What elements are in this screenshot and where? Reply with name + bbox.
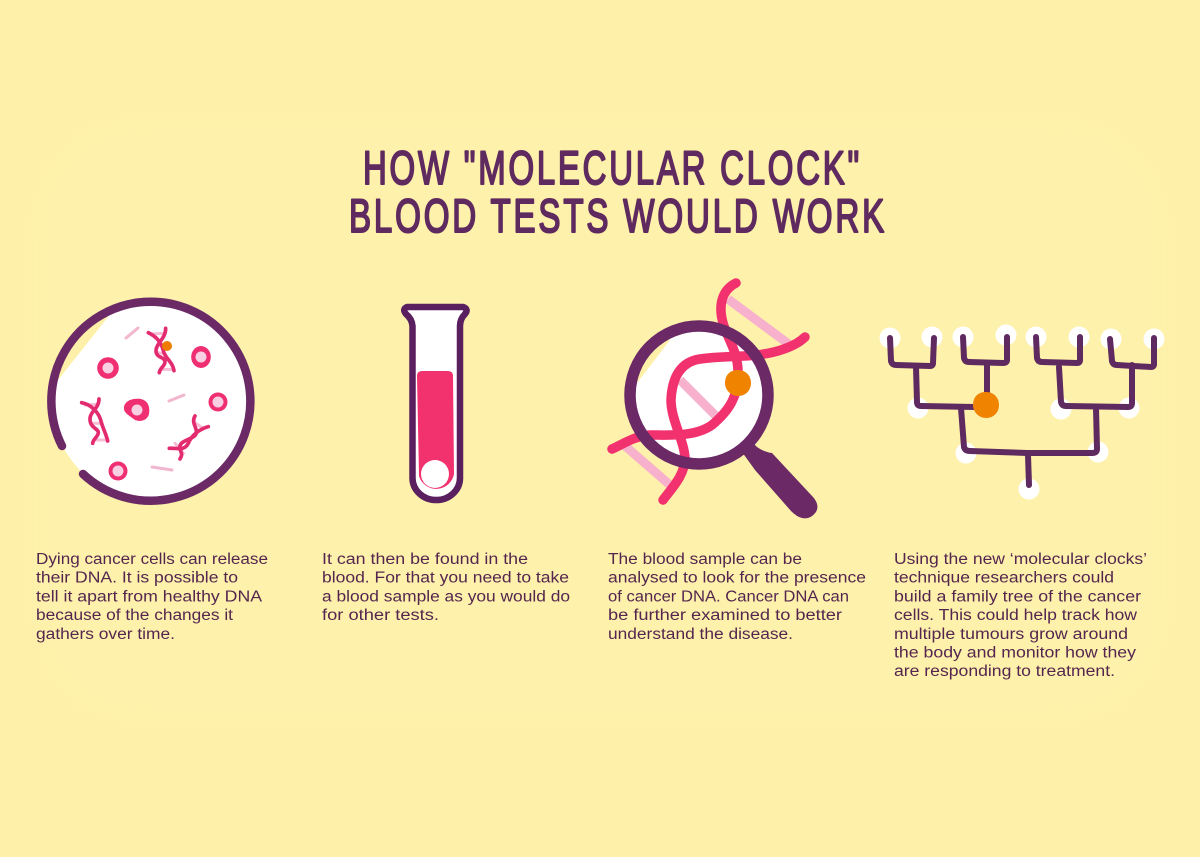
text: step 4: the body and monitor how they — [894, 644, 1136, 662]
DNA strands — [612, 283, 805, 500]
text: step 3: be further examined to better — [608, 607, 842, 624]
text: step 4: Using the new ‘molecular clocks’ — [894, 551, 1147, 568]
text: step 2 — [322, 551, 570, 624]
mutation marker — [725, 370, 751, 396]
text: step 4: are responding to treatment. — [894, 663, 1115, 680]
fragments of DNA — [126, 328, 184, 470]
text: step 4: multiple tumours grow around — [894, 626, 1128, 643]
text: step 1 — [36, 551, 268, 643]
text: step 3: of cancer DNA. Cancer DNA can — [608, 588, 849, 605]
icon: mutation marker — [162, 341, 172, 351]
icon: blood test tube — [404, 307, 467, 500]
title: BLOOD TESTS WOULD WORK — [349, 189, 887, 242]
text: step 1: tell it apart from healthy DNA — [36, 588, 263, 605]
text: step 1: because of the changes it — [36, 607, 234, 624]
magnifier handle — [742, 440, 817, 518]
text: step 4: build a family tree of the cancer — [894, 588, 1141, 605]
text: step 1: gathers over time. — [36, 626, 175, 643]
text: step 4: technique researchers could — [894, 570, 1114, 587]
text: step 4 — [894, 551, 1147, 680]
icon: magnifying glass over DNA — [612, 283, 817, 518]
icon: small DNA strands — [82, 328, 208, 459]
text: step 3 — [608, 551, 866, 643]
title: HOW "MOLECULAR CLOCK" — [363, 141, 862, 194]
icon: family tree of cancer cells — [880, 324, 1164, 500]
text: step 1: their DNA. It is possible to — [36, 570, 238, 587]
tree mutation marker — [973, 392, 999, 418]
text: step 4: cells. This could help track how — [894, 607, 1138, 624]
text: step 2: a blood sample as you would do — [322, 588, 570, 605]
text: step 3: understand the disease. — [608, 626, 793, 643]
text: step 1: Dying cancer cells can release — [36, 551, 268, 568]
title — [349, 141, 887, 242]
tree nodes — [880, 324, 1164, 500]
icon: cancer cells releasing DNA in a circle — [40, 300, 251, 501]
text: step 3: analysed to look for the presence — [608, 570, 866, 587]
text: step 2: for other tests. — [322, 607, 439, 624]
text: step 2: blood. For that you need to take — [322, 570, 569, 587]
text: step 2: It can then be found in the — [322, 551, 528, 568]
text: step 3: The blood sample can be — [608, 551, 802, 568]
magnifier ring — [630, 326, 768, 464]
icon: blood cells — [97, 346, 228, 480]
tree branches — [890, 337, 1154, 485]
DNA rungs — [624, 299, 790, 485]
